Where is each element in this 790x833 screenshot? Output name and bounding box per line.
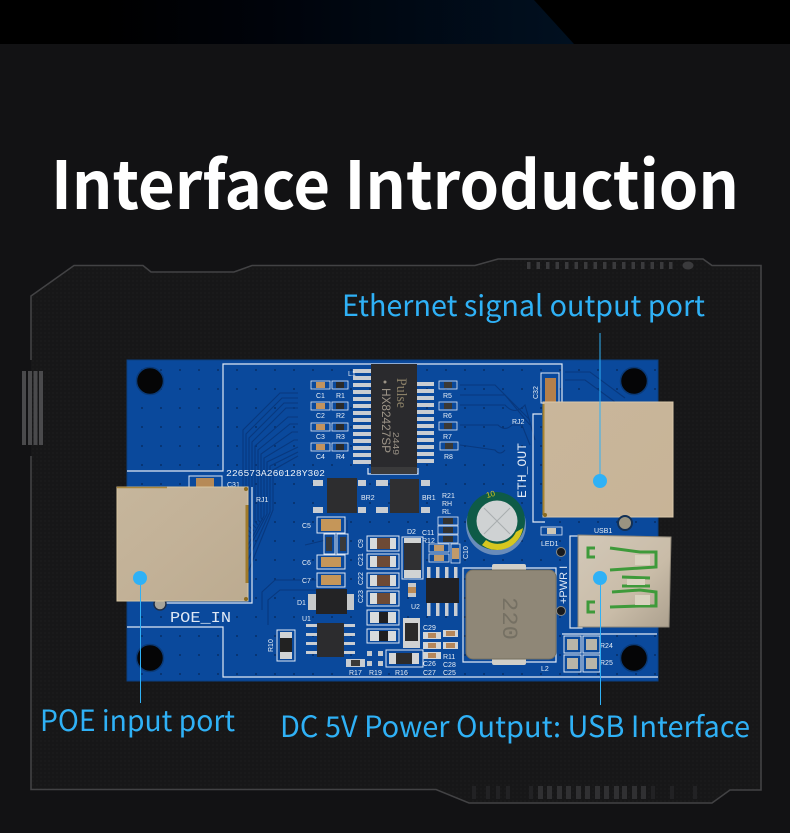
circuit board — [117, 360, 673, 681]
left passives C1-C4 R1-R4: C1 — [316, 393, 325, 400]
left passives C1-C4 R1-R4: R2 — [336, 413, 345, 420]
PWR silk label: +PWR I — [558, 566, 570, 604]
transformer chip — [353, 364, 434, 474]
board serial number: 226573A260128Y302 — [226, 469, 325, 479]
power stage passives: C21 — [358, 553, 365, 566]
power stage passives: C7 — [302, 578, 311, 585]
small passives near capacitor: RL — [442, 509, 451, 516]
R24 R25 pads: R25 — [600, 660, 613, 667]
left passives C1-C4 R1-R4: L1 — [348, 371, 356, 378]
controller U2 — [408, 567, 459, 616]
small passives near capacitor: RH — [442, 501, 452, 508]
tech frame panel — [22, 259, 761, 803]
inductor-side passives: C29 — [423, 625, 436, 632]
callout: DC 5V power output USB interface: DC 5V Power Output: USB Interface — [280, 704, 750, 746]
pcb silk outlines — [127, 364, 658, 677]
regulator U1 — [302, 616, 355, 657]
capacitor C31: C31 — [227, 482, 240, 489]
electrolytic capacitor — [466, 489, 526, 555]
diode D2: D2 — [407, 529, 416, 536]
left passives C1-C4 R1-R4: C3 — [316, 434, 325, 441]
power inductor L2: 220 — [496, 597, 521, 640]
inductor-side passives: R11 — [443, 654, 455, 661]
PWR silk label — [556, 548, 570, 616]
R24 R25 pads — [564, 636, 613, 672]
resistor R10 — [268, 630, 295, 661]
ethernet output RJ45 port — [543, 402, 673, 517]
small passives near capacitor: C11 — [422, 530, 434, 537]
left passives C1-C4 R1-R4: R1 — [336, 393, 345, 400]
inductor-side passives: C26 — [423, 661, 436, 668]
diode D1: D1 — [297, 600, 306, 607]
LED1: USB1 — [594, 528, 612, 535]
callout: POE input port: POE input port — [40, 698, 235, 740]
controller U2: U2 — [411, 604, 420, 611]
inductor-side passives: C27 — [423, 670, 436, 677]
diode D1 — [297, 589, 354, 614]
left passives C1-C4 R1-R4 — [311, 371, 356, 461]
electrolytic capacitor: 10 — [485, 489, 497, 500]
pcb traces — [243, 372, 625, 625]
power stage passives: C9 — [358, 539, 365, 548]
regulator U1: U1 — [302, 616, 311, 623]
RJ1 silk label: RJ1 — [256, 497, 269, 504]
power stage passives: C6 — [302, 560, 311, 567]
bridge rectifier BR2: BR2 — [361, 495, 375, 502]
right passives R5-R8: R7 — [443, 434, 452, 441]
bridge rectifier BR2 — [313, 478, 375, 513]
small passives near capacitor: R12 — [422, 538, 435, 545]
R24 R25 pads: R24 — [600, 643, 613, 650]
bridge rectifier BR1 — [376, 479, 436, 513]
frame side bars — [22, 371, 43, 445]
capacitor C32 — [533, 373, 559, 403]
RJ2 silk label: RJ2 — [512, 419, 525, 426]
left passives C1-C4 R1-R4: R3 — [336, 434, 345, 441]
callout: POE input port — [40, 571, 235, 740]
power stage passives: C23 — [358, 590, 365, 603]
small bottom components: R17 — [349, 670, 362, 677]
transformer chip: Pulse — [393, 378, 409, 408]
right passives R5-R8 — [439, 381, 458, 461]
small bottom components — [346, 650, 423, 677]
title: Interface Introduction — [51, 133, 739, 229]
inductor-side passives: C28 — [443, 662, 456, 669]
LED1 — [541, 516, 632, 548]
diode D2 — [402, 529, 423, 579]
LED1: LED1 — [541, 541, 559, 548]
right passives R5-R8: R6 — [443, 413, 452, 420]
right passives R5-R8: R8 — [444, 454, 453, 461]
power inductor L2 — [466, 564, 556, 673]
callout: ethernet signal output port: Ethernet signal output port — [342, 283, 705, 325]
POE_IN silk label: POE_IN — [170, 610, 231, 627]
callout: ethernet signal output port — [342, 283, 705, 488]
power stage passives: C22 — [358, 572, 365, 585]
resistor R10: R10 — [268, 639, 275, 652]
power stage passives: C5 — [302, 523, 311, 530]
mounting holes — [136, 368, 648, 672]
power stage passives — [302, 517, 399, 643]
USB type-C connector — [578, 535, 671, 627]
small bottom components: R19 — [369, 670, 382, 677]
transformer chip: 2449 — [391, 432, 400, 456]
right passives R5-R8: R5 — [443, 393, 452, 400]
small bottom components: R16 — [395, 670, 408, 677]
left passives C1-C4 R1-R4: C4 — [316, 454, 325, 461]
left passives C1-C4 R1-R4: R4 — [336, 454, 345, 461]
ETH_OUT silk label: ETH_OUT — [515, 443, 530, 498]
transformer chip: HX82427SP — [379, 388, 391, 453]
inductor-side passives: C25 — [443, 670, 456, 677]
bridge rectifier BR1: BR1 — [422, 495, 436, 502]
frame bottom ticks — [472, 786, 697, 799]
callout: DC 5V power output USB interface — [280, 571, 750, 746]
small passives near capacitor — [422, 493, 470, 563]
inductor-side passives — [403, 618, 458, 677]
top band — [0, 0, 790, 44]
pcb base — [127, 360, 658, 681]
frame top ticks — [527, 262, 694, 270]
small passives near capacitor: R21 — [442, 493, 455, 500]
capacitor C32: C32 — [533, 386, 540, 399]
small passives near capacitor: C10 — [463, 546, 470, 559]
POE input RJ45 port — [117, 487, 248, 610]
left passives C1-C4 R1-R4: C2 — [316, 413, 325, 420]
capacitor C31 — [189, 476, 240, 489]
power inductor L2: L2 — [541, 666, 549, 673]
